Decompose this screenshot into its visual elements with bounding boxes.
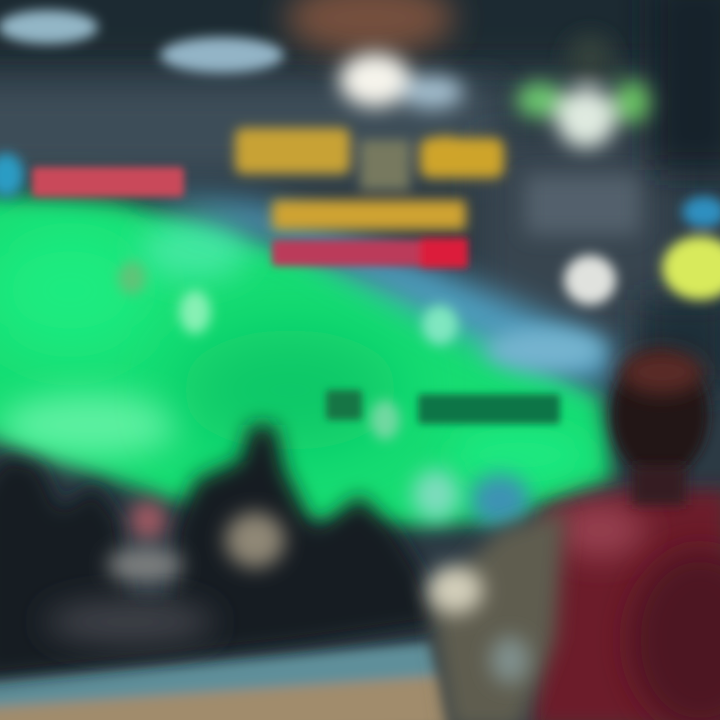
orange glow at top	[285, 0, 455, 56]
cloud: top centre left	[160, 37, 284, 73]
spectator: person in red shirt	[427, 350, 720, 720]
red banner left	[32, 167, 184, 197]
yellow-green badge far right	[662, 196, 720, 300]
blue tablet near crowd	[470, 474, 530, 526]
yellow title block	[235, 128, 504, 230]
green pitch	[0, 195, 612, 530]
white icon right	[564, 255, 616, 305]
pitch markers	[118, 261, 458, 440]
sun glow cloud	[339, 53, 464, 109]
red title strip	[272, 238, 468, 268]
grey text panel right	[525, 175, 640, 235]
green character top right	[516, 34, 650, 148]
dark green score text	[326, 390, 560, 424]
crowd silhouettes	[0, 425, 440, 680]
blue stand edge	[140, 195, 620, 390]
table foreground strip	[0, 642, 450, 720]
cloud: top left	[0, 10, 98, 44]
